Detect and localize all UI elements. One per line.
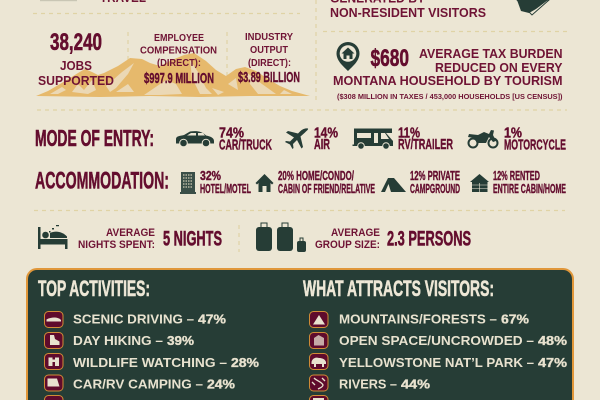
- accommodation: private campground: 12% PRIVATE: [410, 169, 460, 183]
- icon: luggage: [256, 223, 306, 252]
- activity: scenic driving: SCENIC DRIVING –: [73, 312, 194, 326]
- mode: air: [314, 126, 338, 153]
- accommodation: hotel/motel: 32%: [200, 169, 221, 183]
- mode: rv/trailer: RV/TRAILER: [398, 137, 453, 153]
- mode: air: AIR: [314, 137, 330, 153]
- mode: car/truck: CAR/TRUCK: [219, 138, 272, 154]
- icon: rv: [352, 128, 393, 149]
- stat: tax burden: $680: [370, 45, 409, 72]
- heading: mode of entry: MODE OF ENTRY:: [35, 125, 154, 151]
- activity: wildlife watching: WILDLIFE WATCHING –: [73, 356, 227, 370]
- stat: average nights spent: NIGHTS SPENT:: [78, 239, 155, 251]
- mode: motorcycle: [504, 126, 566, 154]
- mode: air: 14%: [314, 126, 338, 142]
- activity: scenic driving: 47%: [198, 312, 226, 326]
- activity: day hiking: [44, 332, 194, 348]
- mode: car/truck: 74%: [219, 126, 244, 142]
- accommodation: home/condo/cabin: 20% HOME/CONDO/: [278, 169, 354, 183]
- stat: employee compensation: (DIRECT):: [157, 57, 201, 69]
- stat: tax burden: REDUCED ON EVERY: [435, 61, 563, 75]
- activity: car/rv camping: [44, 375, 235, 392]
- icon: money stack: [517, 0, 549, 15]
- icon: log cabin: [470, 174, 489, 192]
- stat: jobs supported: SUPPORTED: [38, 74, 114, 88]
- mode: motorcycle: 1%: [504, 126, 522, 142]
- stat: tax burden: [333, 45, 563, 101]
- attraction: yellowstone: 47%: [538, 356, 567, 370]
- attraction: yellowstone: YELLOWSTONE NAT’L PARK –: [339, 356, 534, 370]
- activity: wildlife watching: [44, 354, 259, 370]
- accommodation: rented cabin: 12% RENTED: [493, 169, 540, 183]
- attraction: open space/uncrowded: [310, 332, 567, 348]
- attraction: mountains/forests: MOUNTAINS/FORESTS –: [339, 312, 497, 326]
- icon: bed: [38, 225, 68, 249]
- stat: employee compensation: EMPLOYEE: [154, 32, 204, 44]
- stat: tax burden: MONTANA HOUSEHOLD BY TOURISM: [333, 74, 562, 88]
- activity: scenic driving: [44, 312, 226, 328]
- stat: average nights spent: AVERAGE: [106, 227, 155, 239]
- stat: industry output: (DIRECT):: [248, 57, 291, 69]
- heading: accommodation: ACCOMMODATION:: [35, 168, 169, 194]
- mode: rv/trailer: [398, 126, 453, 153]
- panel: activities and attractions: [27, 269, 573, 400]
- activity: day hiking: DAY HIKING –: [73, 334, 163, 348]
- accommodation: rented cabin: [493, 169, 566, 196]
- stat: jobs supported: [38, 29, 114, 88]
- attraction: rivers: [310, 375, 430, 392]
- activity: wildlife watching: 28%: [231, 356, 259, 370]
- activity: next row icon: [44, 396, 63, 400]
- accommodation: private campground: CAMPGROUND: [410, 182, 460, 196]
- attraction: mountains/forests: [310, 312, 529, 328]
- stat: industry output: OUTPUT: [250, 44, 289, 56]
- stat: average nights spent: 5 NIGHTS: [163, 226, 222, 250]
- icon: plane: [285, 128, 308, 149]
- activity: car/rv camping: 24%: [207, 378, 235, 392]
- stat: jobs supported: JOBS: [60, 59, 92, 73]
- accommodation: hotel/motel: [200, 169, 251, 196]
- attraction: open space/uncrowded: 48%: [538, 334, 567, 348]
- accommodation: hotel/motel: HOTEL/MOTEL: [200, 182, 251, 196]
- stat: tax burden: AVERAGE TAX BURDEN: [419, 47, 562, 61]
- text: generated by non-resident visitors: NON-RESIDENT VISITORS: [330, 6, 486, 20]
- stat: tax burden: ($308 MILLION IN TAXES / 453,000 HOUSEHOLDS [US CENSUS]): [337, 92, 563, 101]
- attraction: yellowstone: [310, 354, 567, 370]
- stat: average group size: GROUP SIZE:: [315, 239, 380, 251]
- text: generated by non-resident visitors: [330, 0, 486, 20]
- activity: day hiking: 39%: [167, 334, 194, 348]
- activity: car/rv camping: CAR/RV CAMPING –: [73, 378, 203, 392]
- stat: employee compensation: [140, 32, 217, 87]
- accommodation: home/condo/cabin: CABIN OF FRIEND/RELATIVE: [278, 182, 375, 196]
- stat: employee compensation: COMPENSATION: [140, 44, 217, 56]
- icon: car: [176, 131, 214, 147]
- stat: jobs supported: 38,240: [50, 29, 102, 56]
- attraction: next row icon: [310, 396, 328, 400]
- attraction: rivers: RIVERS –: [339, 378, 397, 392]
- icon: hotel: [180, 172, 196, 194]
- attraction: rivers: 44%: [401, 378, 430, 392]
- icon: top-left badge remnant: [40, 0, 77, 1]
- stat: average group size: AVERAGE: [331, 227, 380, 239]
- icon: house: [256, 174, 274, 192]
- icon: home map pin: [336, 42, 360, 71]
- stat: industry output: INDUSTRY: [245, 31, 293, 43]
- heading: top activities: TOP ACTIVITIES:: [38, 276, 150, 301]
- attraction: open space/uncrowded: OPEN SPACE/UNCROWDED –: [339, 334, 534, 348]
- stat: employee compensation: $997.9 MILLION: [144, 70, 214, 87]
- icon: motorcycle: [468, 130, 498, 148]
- mode: rv/trailer: 11%: [398, 126, 420, 142]
- illustration: mountains: [36, 53, 310, 97]
- mode: car/truck: [219, 126, 272, 154]
- accommodation: home/condo/cabin: [278, 169, 375, 196]
- stat: industry output: $3.89 BILLION: [238, 69, 300, 86]
- stat: average group size: 2.3 PERSONS: [387, 226, 471, 250]
- stat: average group size: [315, 226, 471, 251]
- accommodation: private campground: [410, 169, 460, 196]
- stat: industry output: [238, 31, 300, 86]
- icon: tent: [381, 178, 406, 192]
- attraction: mountains/forests: 67%: [501, 312, 529, 326]
- stat: average nights spent: [78, 226, 222, 251]
